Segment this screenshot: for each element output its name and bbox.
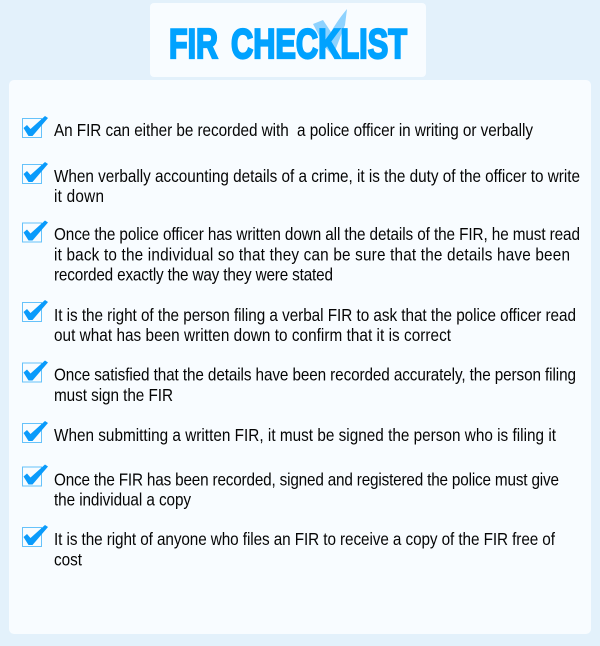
item 2: it down (54, 186, 104, 206)
item 4: out what has been written down to confirm that it is correct (54, 325, 451, 345)
item 5: must sign the FIR (54, 385, 173, 405)
title check mark (313, 9, 347, 56)
title card (150, 3, 426, 77)
item 7: Once the FIR has been recorded, signed and registered the police must give (54, 469, 559, 490)
item 3: it back to the individual so that they can be sure that the details have been (54, 244, 570, 265)
item 7 (22, 464, 559, 510)
item 6: When submitting a written FIR, it must be signed the person who is filing it (54, 425, 556, 445)
item 8: It is the right of anyone who files an FIR to receive a copy of the FIR free of (54, 529, 555, 549)
item 8: cost (54, 549, 82, 570)
item 2: When verbally accounting details of a crime, it is the duty of the officer to write (54, 166, 580, 186)
item 8 (22, 525, 555, 570)
title: FIR (169, 20, 218, 67)
item 4 (22, 300, 576, 345)
item 3: recorded exactly the way they were stated (54, 264, 333, 285)
item 7: the individual a copy (54, 489, 192, 510)
item 2 (22, 162, 580, 206)
item 5: Once satisfied that the details have been recorded accurately, the person filing (54, 364, 576, 385)
item 3 (22, 220, 580, 285)
item 4: It is the right of the person filing a verbal FIR to ask that the police officer read (54, 305, 576, 325)
title (169, 20, 407, 67)
title: CHECKLIST (231, 20, 407, 67)
item 1: An FIR can either be recorded with a police officer in writing or verbally (54, 120, 534, 140)
item 5 (22, 360, 576, 405)
item 3: Once the police officer has written down all the details of the FIR, he must read (54, 224, 580, 244)
